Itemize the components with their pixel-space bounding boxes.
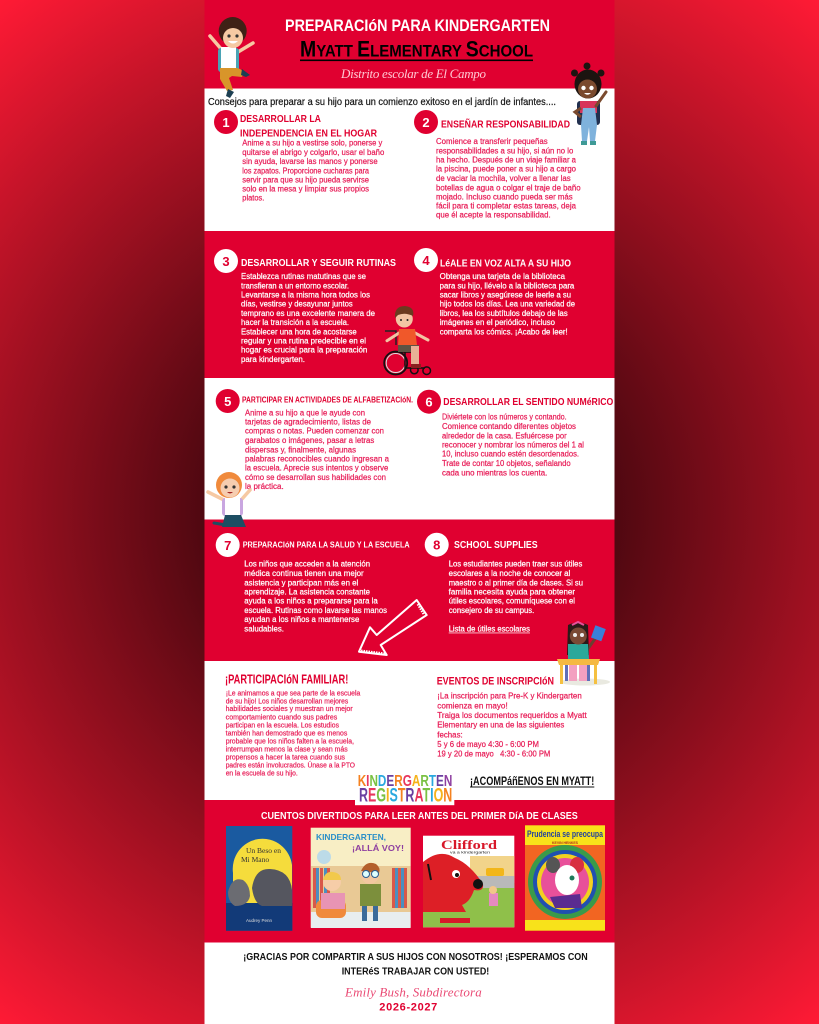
text 3 [241,272,375,364]
text: family participation: participan en la escuela. Los estudios [226,722,340,729]
text: registration events: 5 y 6 de mayo 4:30 - 6:00 PM [437,740,539,749]
text 8: útiles escolares, comuníquese con el [449,597,575,606]
text: family participation: propensos a hacer la tarea cuando sus [226,755,346,762]
book cover: Un Beso en Mi Mano: Un Beso en [246,846,281,855]
text 1: los zapatos. Proporcione cucharas para [242,166,370,175]
text 5: compras o notas. Pueden comenzar con [245,427,384,436]
text 4: comparta los cómics. ¡Acabo de leer! [440,327,568,336]
text: family participation: ¡Le animamos a que sea parte de la escuela [226,690,360,697]
text 4: imágenes en el periódico, incluso [440,318,556,327]
books heading: CUENTOS DIVERTIDOS PARA LEER ANTES DEL PRIMER DíA DE CLASES [261,810,578,822]
number badge 6: 6 [425,395,433,410]
icon: girl at desk [557,622,610,686]
heading 4: LéALE EN VOZ ALTA A SU HIJO [440,258,571,270]
book cover: Prudencia se preocupa [525,825,605,931]
text 4: para su hijo, llévelo a la biblioteca para [440,281,575,290]
text 7 [244,560,387,633]
book cover: Clifford [423,836,514,927]
text 3: hogar es crucial para la preparación [241,346,367,355]
text 2: Comience a transferir pequeñas [436,137,548,146]
text 2: botellas de agua o colgar el traje de baño [436,183,581,192]
text 1: platos. [242,194,264,203]
text 2: la piscina, puede poner a su hijo a cargo [436,165,577,174]
text 6: Diviértete con los números y contando. [442,413,567,422]
text 6 [442,413,584,477]
text 7: ayuda a los niños a prepararse para la [244,597,378,606]
text: registration events: 19 y 20 de mayo 4:30 - 6:00 PM [437,750,550,759]
heading 6: DESARROLLAR EL SENTIDO NUMéRICO [443,396,613,408]
link: supplies list: Lista de útiles escolares [449,624,530,633]
text 7: aprendizaje. La asistencia constante [244,587,370,596]
book cover: Kindergarten, allá voy [311,828,411,928]
heading 1: DESARROLLAR LA [240,113,321,125]
text 7: médica continua tienen una mejor [244,569,364,578]
text 3: Establecer una hora de acostarse [241,327,357,336]
number badge 7 [216,533,240,557]
text: family participation [226,690,360,778]
text 5: la práctica. [245,482,284,491]
text 2: ha hecho. Después de un viaje familiar a [436,155,577,164]
text 1: solo en la mesa y limpiar sus propios [242,185,369,194]
page panel [204,0,614,1024]
panel: tip 3 [214,249,396,364]
text 1: quitarse el abrigo y colgarlo, usar el baño [242,148,385,157]
text 7: saludables. [244,624,284,633]
closing message: INTERéS TRABAJAR CON USTED! [342,965,489,977]
text 2: que él acepte la responsabilidad. [436,211,551,220]
text: registration events [437,692,588,759]
text 5: dispersas y, finalmente, algunas [245,445,356,454]
icon: girl with orange hair [208,472,250,527]
number badge 1: 1 [222,115,230,130]
heading 2: ENSEÑAR RESPONSABILIDAD [441,118,570,131]
heading 1 [240,113,377,140]
text 1: Anime a su hijo a vestirse solo, ponerse y [242,139,382,148]
text 7: asistencia y participan más en el [244,578,359,587]
kindergarten registration logo: KINDERGARTEN [358,773,452,790]
heading 1: INDEPENDENCIA EN EL HOGAR [240,128,377,140]
text 5: Anime a su hijo a que le ayude con [245,408,365,417]
number badge 7: 7 [224,538,231,553]
text 6: alrededor de la casa. Esfuércese por [442,431,567,440]
school year: 2026-2027 [379,1002,437,1014]
book cover: Clifford: va a kindergarten [450,850,490,854]
text 3: hacer la transición a la escuela. [241,318,349,327]
text 5 [245,408,390,491]
text: family participation: comportamiento cuando sus padres [226,714,338,721]
book cover: Kindergarten, allá voy: ¡ALLÁ VOY! [352,843,404,853]
panel: tip 6 [417,390,613,477]
book cover: Un Beso en Mi Mano: Mi Mano [241,855,269,864]
district name: Distrito escolar de El Campo [340,66,486,81]
number badge 6 [417,390,441,414]
book cover: Un Beso en Mi Mano: Audrey Penn [246,918,273,923]
text 8: consejero de su campus. [449,606,534,615]
heading 8: SCHOOL SUPPLIES [454,539,538,551]
text 5: cómo se desarrollan sus habilidades con [245,473,386,482]
number badge 1 [214,110,238,134]
text 3: transfieran a un entorno escolar. [241,281,349,290]
heading 7: PREPARACIóN PARA LA SALUD Y LA ESCUELA [243,541,410,550]
text: family participation: también han demostrado que es menos [226,730,348,737]
text 3: Establezca rutinas matutinas que se [241,272,366,281]
heading: registration events: EVENTOS DE INSCRIPCIóN [437,675,554,687]
book cover: Clifford: Clifford [441,837,498,852]
number badge 8 [425,533,449,557]
text 4: hijo todos los días. Lea una variedad de [440,300,575,309]
panel: tip 1 [214,110,385,203]
number badge 4: 4 [422,253,430,268]
panel: tip 7 [216,533,410,633]
text 1: sin ayuda, lavarse las manos y ponerse [242,157,378,166]
text 2: responsabilidades a su hijo, si aún no lo [436,146,574,155]
text: registration events: comienza en mayo! [437,701,508,710]
text 6: Comience contando diferentes objetos [442,422,576,431]
text 5: palabras reconocibles cuando ingresan a [245,455,390,464]
text 8: familia necesita ayuda para obtener [449,587,575,596]
text 1: servir para que su hijo pueda servirse [242,175,369,184]
closing message [243,951,588,977]
text 6: cada uno mientras los cuenta. [442,468,547,477]
book cover: Un Beso en Mi Mano [226,826,292,931]
text 3: días, vestirse y desayunar juntos [241,300,353,309]
text 8 [449,560,583,615]
panel: tip 2 [414,110,581,220]
panel: registration events [437,675,588,759]
number badge 4 [414,248,438,272]
text 8: maestro o al primer día de clases. Si su [449,578,583,587]
kindergarten registration logo: REGISTRATION [359,786,452,807]
text 4 [440,272,575,336]
text: family participation: interrumpan menos la clase y sean más [226,747,348,754]
number badge 2 [414,110,438,134]
text: family participation: en la escuela de su hijo. [226,771,298,778]
text 5: la escuela. Aprecie sus intentos y observe [245,464,388,473]
text: registration events: Traiga los documentos requeridos a Myatt [437,711,588,720]
text: family participation: probable que los niños falten a la escuela, [226,738,354,745]
text 7: Los niños que acceden a la atención [244,560,370,569]
text 2: fácil para ti completar estas tareas, deja [436,202,577,211]
join us callout: ¡ACOMPáñENOS EN MYATT! [470,776,594,788]
arrow [359,600,427,655]
text 4: sacar libros y asegúrese de leerle a su [440,290,571,299]
text 4: Obtenga una tarjeta de la biblioteca [440,272,566,281]
text: family participation: habilidades sociales y muestran un mejor [226,706,353,713]
icon: boy in wheelchair [384,306,431,375]
text 4: libros, lea los subtítulos debajo de las [440,309,568,318]
text 2 [436,137,581,220]
signature: Emily Bush, Subdirectora [344,985,482,1000]
text 6: Trate de contar 10 objetos, señalando [442,459,571,468]
text 3: Levantarse a la misma hora todos los [241,290,370,299]
number badge 5 [216,389,240,413]
book cover: Kindergarten, allá voy: KINDERGARTEN, [316,832,386,842]
text 3: para kindergarten. [241,355,305,364]
closing message: ¡GRACIAS POR COMPARTIR A SUS HIJOS CON NOSOTROS! ¡ESPERAMOS CON [243,951,588,963]
panel: tip 5 [216,389,413,491]
text 5: tarjetas de agradecimiento, listas de [245,418,371,427]
header title: PREPARACIóN PARA KINDERGARTEN [285,17,550,35]
text 7: escuela. Rutinas como lavarse las manos [244,606,387,615]
book cover: Prudencia se preocupa: Prudencia se preocupa [527,829,604,839]
number badge 5: 5 [224,394,231,409]
text: registration events: Elementary en una de las siguientes [437,721,564,730]
number badge 8: 8 [433,538,440,553]
text: registration events: ¡La inscripción para Pre-K y Kindergarten [437,692,582,701]
text 8: Los estudiantes pueden traer sus útiles [449,560,582,569]
text: family participation: padres están involucrados. Únase a la PTO [226,761,356,770]
text 3: regular y una rutina predecible en el [241,337,366,346]
kindergarten registration logo [355,772,454,807]
heading 5: PARTICIPAR EN ACTIVIDADES DE ALFABETIZACIóN. [242,395,413,404]
panel: tip 8 [425,533,583,633]
text: family participation: de su hijo! Los niños desarrollan mejores [226,698,349,705]
number badge 2: 2 [422,115,430,130]
text 6: 10, incluso cuando estén desordenados. [442,450,579,459]
panel: tip 4 [414,248,575,336]
intro sentence: Consejos para preparar a su hijo para un comienzo exitoso en el jardín de infantes.... [208,97,556,108]
icon: girl with overalls [571,62,606,145]
book cover: Prudencia se preocupa: KEVIN HENKES [552,840,578,845]
text 1 [242,139,385,203]
text 2: de vaciar la mochila, volver a llenar las [436,174,571,183]
text 5: garabatos o imágenes, pasar a letras [245,436,374,445]
school name: MYATT ELEMENTARY SCHOOL [300,37,533,62]
number badge 3 [214,249,238,273]
heading 3: DESARROLLAR Y SEGUIR RUTINAS [241,257,396,269]
text: registration events: fechas: [437,730,463,739]
icon: jumping boy [210,17,253,98]
panel: family participation [225,672,360,778]
text 2: mojado. Incluso cuando pueda ser más [436,192,573,201]
heading: family participation: ¡PARTICIPACIóN FAMILIAR! [225,672,348,686]
text 8: escolares a la noche de conocer al [449,569,571,578]
text 6: reconocer y nombrar los números del 1 al [442,441,584,450]
text 3: temprano es una excelente manera de [241,309,375,318]
number badge 3: 3 [222,254,230,269]
text 7: ayudan a los niños a mantenerse [244,615,359,624]
